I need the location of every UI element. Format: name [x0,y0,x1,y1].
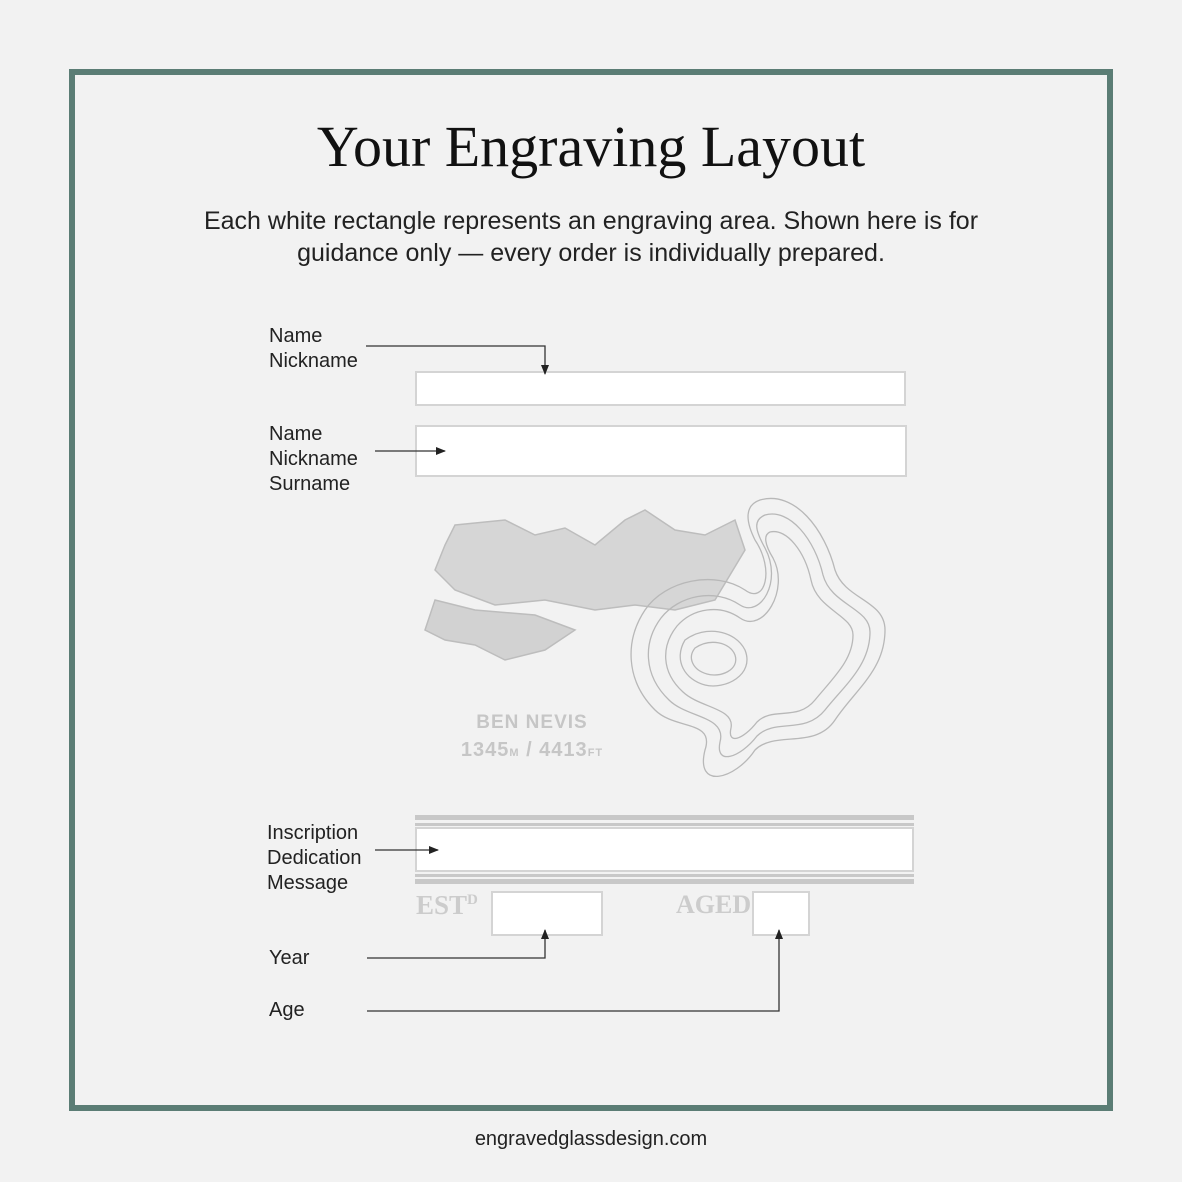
text: ESTD: ESTD [416,890,478,920]
label: name nickname surname: Name [269,423,322,445]
label: name nickname 1 [269,325,358,372]
illustration: landscape and contour map: 1345M / 4413FT [461,739,603,761]
label: name nickname 1: Nickname [269,350,358,372]
decorative bands around inscription [415,815,914,820]
box: year [491,891,603,936]
footer url: engravedglassdesign.com [475,1128,707,1150]
box: top engraving [415,371,906,406]
illustration: landscape and contour map [424,498,886,777]
label: name nickname surname: Surname [269,473,350,495]
label: year: Year [269,947,309,969]
box: age [752,891,810,936]
label: inscription dedication message [267,822,362,894]
title: Your Engraving Layout [317,114,865,179]
frame border [69,69,1113,1111]
label: inscription dedication message: Inscription [267,822,358,844]
label: age: Age [269,999,305,1021]
subtitle text: Each white rectangle represents an engraving area. Shown here is for guidance only — every order is individually prepared. [204,207,978,267]
label: inscription dedication message: Dedication [267,847,362,869]
label: inscription dedication message: Message [267,872,348,894]
label: name nickname surname: Nickname [269,448,358,470]
text: AGED: AGED [676,890,751,919]
text: ben nevis: BEN NEVIS [476,712,588,733]
box: inscription [415,827,914,872]
label: name nickname 1: Name [269,325,322,347]
label: name nickname surname [269,423,358,495]
box: second engraving [415,425,907,477]
